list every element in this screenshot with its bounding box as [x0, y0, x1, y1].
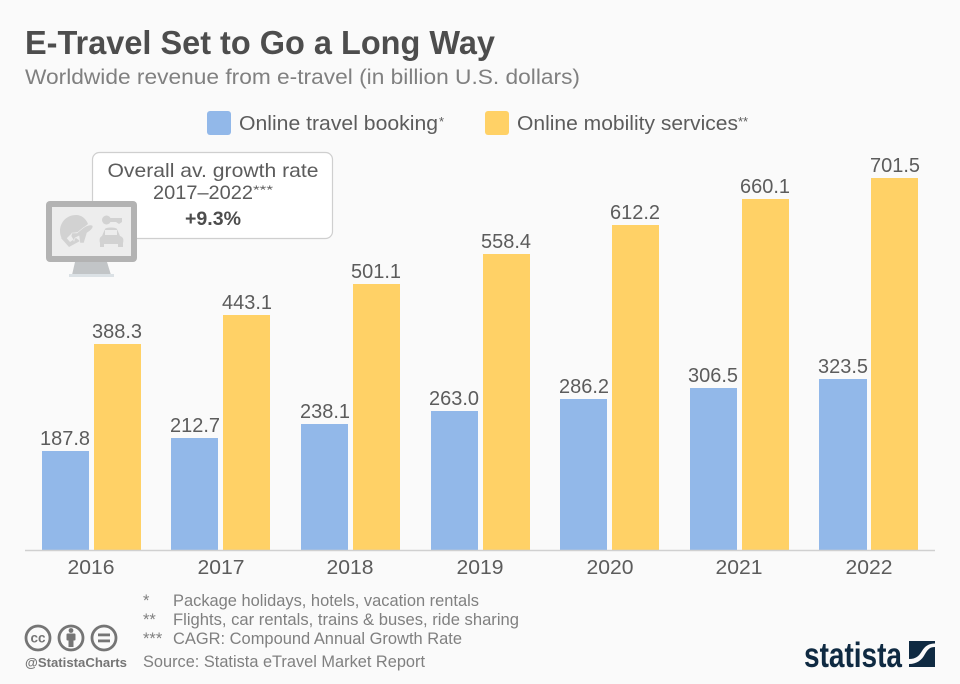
bars: 2017: 2017 — [198, 557, 244, 579]
callout: growth rate: +9.3% — [185, 208, 241, 230]
handle: @StatistaCharts — [25, 655, 127, 670]
legend: online travel booking: Online travel booking — [239, 113, 438, 135]
bars: 2022: 701.5 — [870, 155, 920, 177]
legend: online mobility services: Online mobility services — [517, 113, 738, 135]
bars: 2020: 286.2 — [559, 376, 609, 398]
logo: statista: statista — [804, 636, 902, 675]
legend: online travel booking: * — [439, 114, 444, 129]
footnotes: ** — [143, 611, 156, 629]
source: Source: Statista eTravel Market Report — [143, 653, 425, 671]
bars: 2022: 2022 — [846, 557, 892, 579]
footnotes: * — [143, 592, 150, 610]
bars: 2019: 263.0 — [429, 388, 479, 410]
bars: 2022 — [818, 155, 920, 579]
footnotes: *** — [143, 630, 163, 648]
callout: growth rate — [92, 152, 332, 238]
footnotes: Package holidays, hotels, vacation rentals — [173, 592, 479, 610]
bars: 2017: 212.7 — [170, 415, 220, 437]
bars: 2022: 323.5 — [818, 356, 868, 378]
legend — [207, 111, 748, 135]
icon: key and car — [100, 216, 123, 247]
icon: creative commons licence — [26, 626, 116, 650]
title: E-Travel Set to Go a Long Way — [25, 24, 496, 61]
icon: statista mark — [909, 641, 935, 667]
legend: online mobility services: ** — [738, 114, 748, 129]
icon: globe and plane — [60, 215, 93, 247]
callout: growth rate: 2017–2022 — [153, 182, 253, 204]
bars: 2019 — [429, 231, 531, 579]
bars: 2017 — [170, 292, 272, 579]
callout: growth rate: Overall av. growth rate — [108, 160, 318, 182]
footnotes: Flights, car rentals, trains & buses, ride sharing — [173, 611, 519, 629]
bars: 2020: 612.2 — [610, 202, 660, 224]
subtitle: Worldwide revenue from e-travel (in billion U.S. dollars) — [25, 66, 580, 89]
icon: creative commons licence: cc — [30, 630, 46, 646]
bars: 2021: 660.1 — [740, 176, 790, 198]
bars: 2016: 2016 — [68, 557, 114, 579]
bars: 2021: 306.5 — [688, 365, 738, 387]
footnotes: CAGR: Compound Annual Growth Rate — [173, 630, 462, 648]
bars: 2019: 2019 — [456, 557, 504, 579]
callout: growth rate: *** — [253, 183, 273, 197]
bars: 2018 — [300, 261, 401, 579]
bars: 2016 — [40, 321, 142, 579]
bars: 2020: 2020 — [586, 557, 634, 579]
icon: monitor with plane and car — [46, 201, 137, 277]
bars: 2018: 2018 — [326, 557, 374, 579]
bars: 2020 — [559, 202, 660, 579]
bars: 2019: 558.4 — [481, 231, 531, 253]
bar chart — [25, 155, 935, 579]
bars: 2018: 501.1 — [351, 261, 401, 283]
bars: 2018: 238.1 — [300, 401, 350, 423]
bars: 2021 — [688, 176, 790, 579]
bars: 2016: 187.8 — [40, 428, 90, 450]
bars: 2021: 2021 — [716, 557, 762, 579]
bars: 2016: 388.3 — [92, 321, 142, 343]
footnotes — [143, 592, 519, 648]
bars: 2017: 443.1 — [222, 292, 272, 314]
